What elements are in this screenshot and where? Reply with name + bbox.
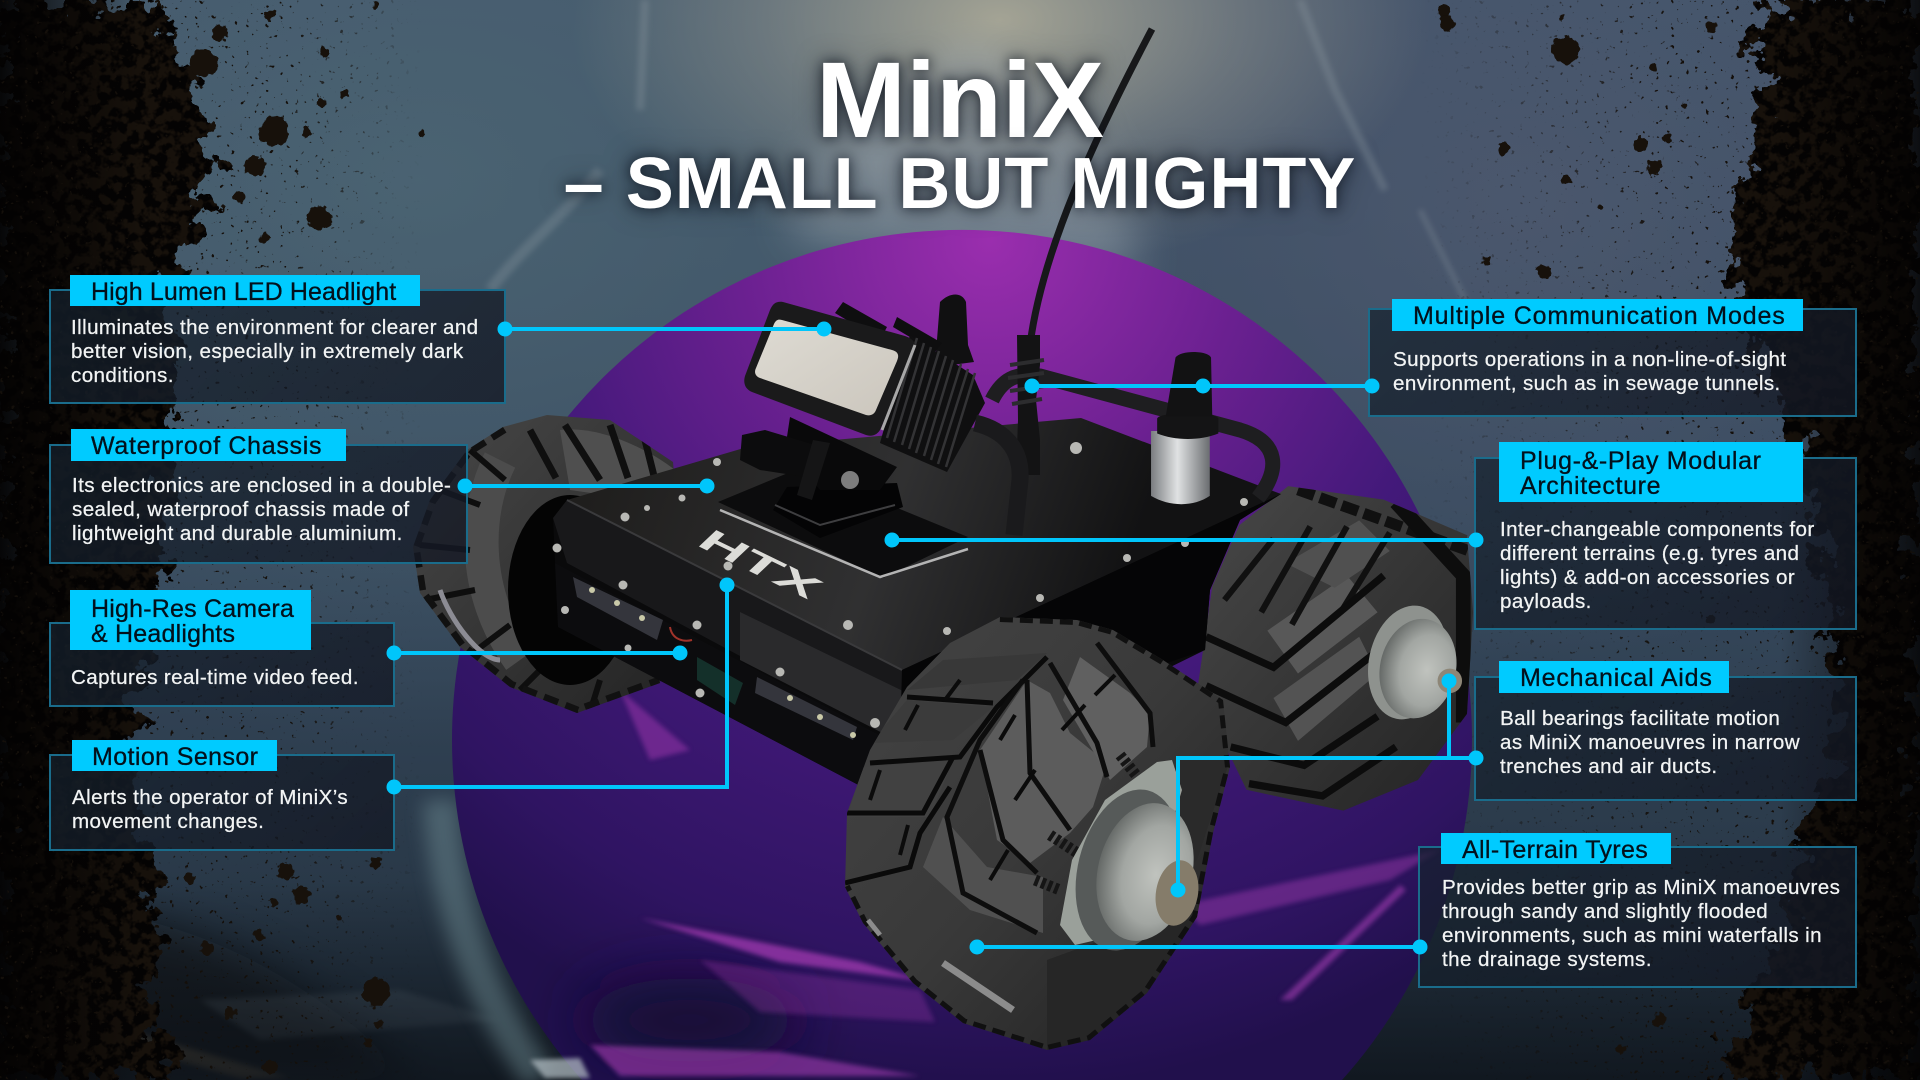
- dirt field: right: [1715, 0, 1920, 1080]
- panel: Mechanical Aids: [1474, 661, 1857, 801]
- description: [1393, 348, 1786, 395]
- description: trenches and air ducts.: [1500, 755, 1718, 778]
- connector: modular: [884, 532, 1484, 548]
- description: [71, 316, 479, 387]
- front tyre: [845, 617, 1230, 1050]
- heading: All-Terrain Tyres: [1462, 836, 1648, 864]
- description: different terrains (e.g. tyres and: [1500, 542, 1799, 565]
- description: as MiniX manoeuvres in narrow: [1500, 731, 1800, 754]
- description: Alerts the operator of MiniX’s: [72, 786, 348, 809]
- description: Ball bearings facilitate motion: [1500, 707, 1780, 730]
- description: [1500, 707, 1800, 778]
- description: Provides better grip as MiniX manoeuvres: [1442, 876, 1840, 899]
- description: through sandy and slightly flooded: [1442, 900, 1768, 923]
- description: Its electronics are enclosed in a double-: [72, 474, 451, 497]
- heading: [1499, 442, 1803, 502]
- description: the drainage systems.: [1442, 948, 1652, 971]
- description: Inter-changeable components for: [1500, 518, 1815, 541]
- description: better vision, especially in extremely dark: [71, 340, 464, 363]
- heading: Architecture: [1520, 472, 1661, 500]
- description: environments, such as mini waterfalls in: [1442, 924, 1822, 947]
- description: [1442, 876, 1840, 971]
- description: [72, 786, 348, 833]
- description: environment, such as in sewage tunnels.: [1393, 372, 1781, 395]
- cable gland and spring: [1008, 335, 1044, 475]
- chassis body: [552, 418, 1281, 800]
- connector: chassis: [458, 478, 714, 494]
- panel: High Lumen LED Headlight: [49, 275, 506, 404]
- panel: Waterproof Chassis: [49, 429, 468, 564]
- antenna cable: [1030, 29, 1152, 345]
- panel: Multiple Communication Modes: [1368, 299, 1857, 417]
- heading: Multiple Communication Modes: [1413, 302, 1786, 330]
- robot photo illustration: MiniX: [414, 28, 1473, 1050]
- back-right tyre: [1198, 486, 1473, 811]
- handle bar: [992, 375, 1273, 498]
- heading: [70, 590, 311, 650]
- panel: High-Res Camera & Headlights: [49, 590, 395, 707]
- connector: motion sensor: [386, 578, 734, 794]
- title: – SMALL BUT MIGHTY: [564, 144, 1356, 224]
- title: [560, 39, 1360, 224]
- headlight: [744, 302, 985, 472]
- heading: Mechanical Aids: [1520, 664, 1713, 692]
- description: conditions.: [71, 364, 174, 387]
- connector: camera: [386, 646, 688, 660]
- description: lightweight and durable aluminium.: [72, 522, 403, 545]
- connector: headlight: [498, 322, 832, 336]
- heading: Motion Sensor: [92, 743, 258, 771]
- camera mount: [740, 302, 942, 538]
- front hub: [1060, 760, 1208, 962]
- description: Captures real-time video feed.: [71, 666, 359, 689]
- heading: & Headlights: [91, 620, 235, 648]
- panel: All-Terrain Tyres: [1418, 833, 1857, 988]
- back antenna: [936, 294, 974, 366]
- description: movement changes.: [72, 810, 264, 833]
- description: [72, 474, 451, 545]
- description: Illuminates the environment for clearer and: [71, 316, 479, 339]
- description: payloads.: [1500, 590, 1592, 613]
- mount plate: [718, 468, 968, 578]
- back-left tyre: [413, 415, 680, 713]
- heading: High Lumen LED Headlight: [91, 278, 396, 306]
- connector: mechanical aids: [1170, 674, 1484, 898]
- front antenna: [1151, 352, 1218, 504]
- description: lights) & add-on accessories or: [1500, 566, 1795, 589]
- dirt field: left: [0, 0, 210, 1080]
- connector: communication: [1024, 378, 1380, 394]
- description: Supports operations in a non-line-of-sight: [1393, 348, 1786, 371]
- chassis support tube: [975, 423, 1020, 535]
- connector: tyres: [970, 940, 1428, 954]
- panel: Plug-&-Play Modular Architecture: [1474, 442, 1857, 630]
- HTX logo: HTX: [695, 520, 827, 609]
- title: MiniX: [816, 39, 1104, 160]
- heading: High-Res Camera: [91, 595, 294, 623]
- back hub: [1358, 598, 1466, 727]
- description: [1500, 518, 1815, 613]
- heading: Plug-&-Play Modular: [1520, 447, 1762, 475]
- description: sealed, waterproof chassis made of: [72, 498, 410, 521]
- heading: Waterproof Chassis: [91, 432, 322, 460]
- panel: Motion Sensor: [49, 740, 395, 851]
